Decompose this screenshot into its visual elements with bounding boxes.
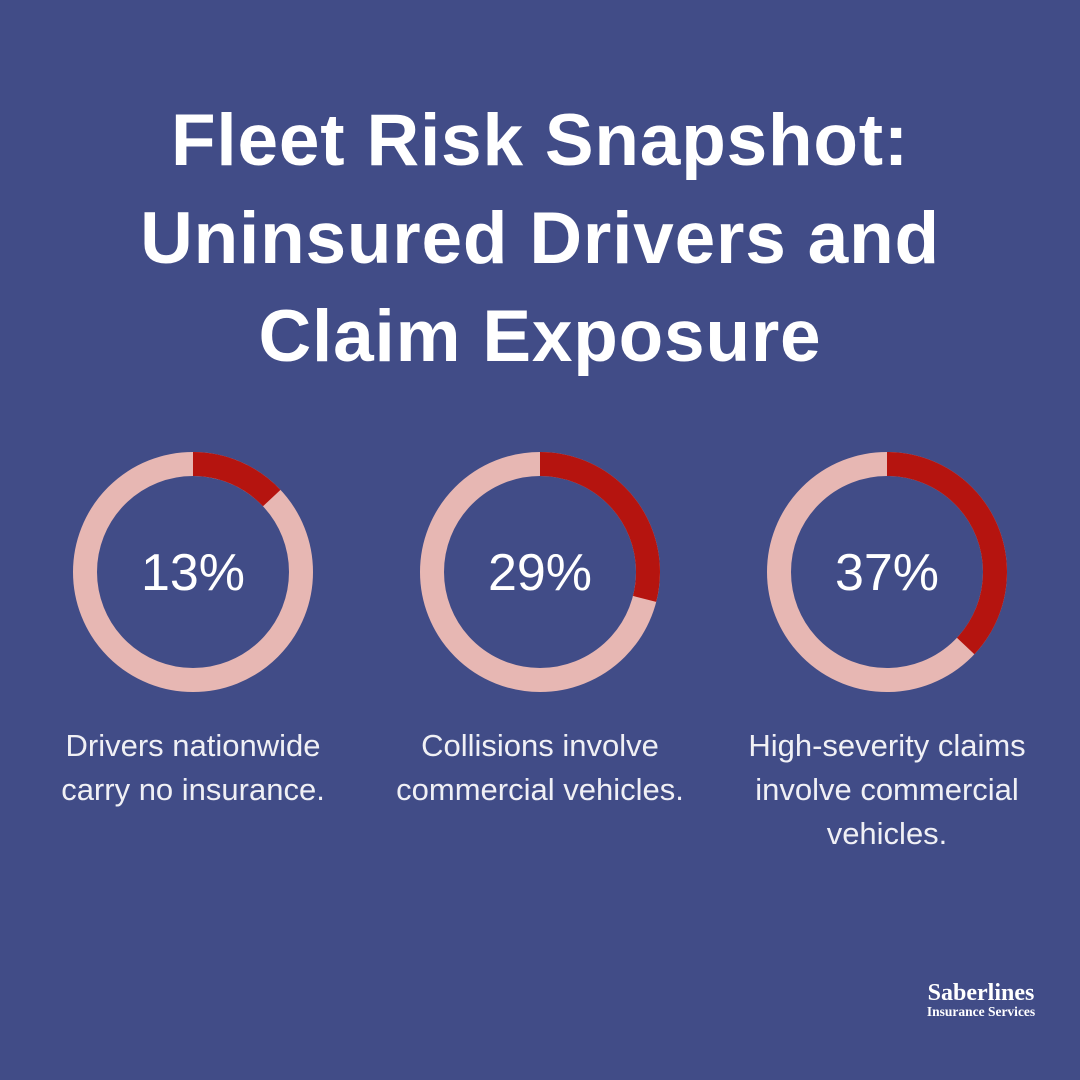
label xyxy=(61,728,325,807)
label xyxy=(396,728,684,807)
logo xyxy=(927,980,1035,1019)
label: carry no insurance. xyxy=(61,772,325,807)
stat: 13% xyxy=(61,452,325,807)
label: Collisions involve xyxy=(421,728,659,763)
title: Fleet Risk Snapshot: xyxy=(171,100,909,181)
logo: Insurance Services xyxy=(927,1004,1035,1019)
label xyxy=(748,728,1026,851)
label: commercial vehicles. xyxy=(396,772,684,807)
donut chart 37%: 37% xyxy=(835,544,939,602)
donut chart 29% xyxy=(420,452,660,692)
donut chart 13% xyxy=(73,452,313,692)
label: Drivers nationwide xyxy=(66,728,320,763)
donut chart 29%: 29% xyxy=(488,544,592,602)
title: Uninsured Drivers and xyxy=(140,198,940,279)
title xyxy=(140,100,940,377)
label: involve commercial xyxy=(755,772,1019,807)
label: High-severity claims xyxy=(748,728,1026,763)
donut chart 13%: 13% xyxy=(141,544,245,602)
stat: 29% xyxy=(396,452,684,807)
label: vehicles. xyxy=(827,816,947,851)
donut chart 37% xyxy=(767,452,1007,692)
title: Claim Exposure xyxy=(259,296,821,377)
stat: 37% xyxy=(748,452,1026,851)
logo: Saberlines xyxy=(928,980,1034,1006)
